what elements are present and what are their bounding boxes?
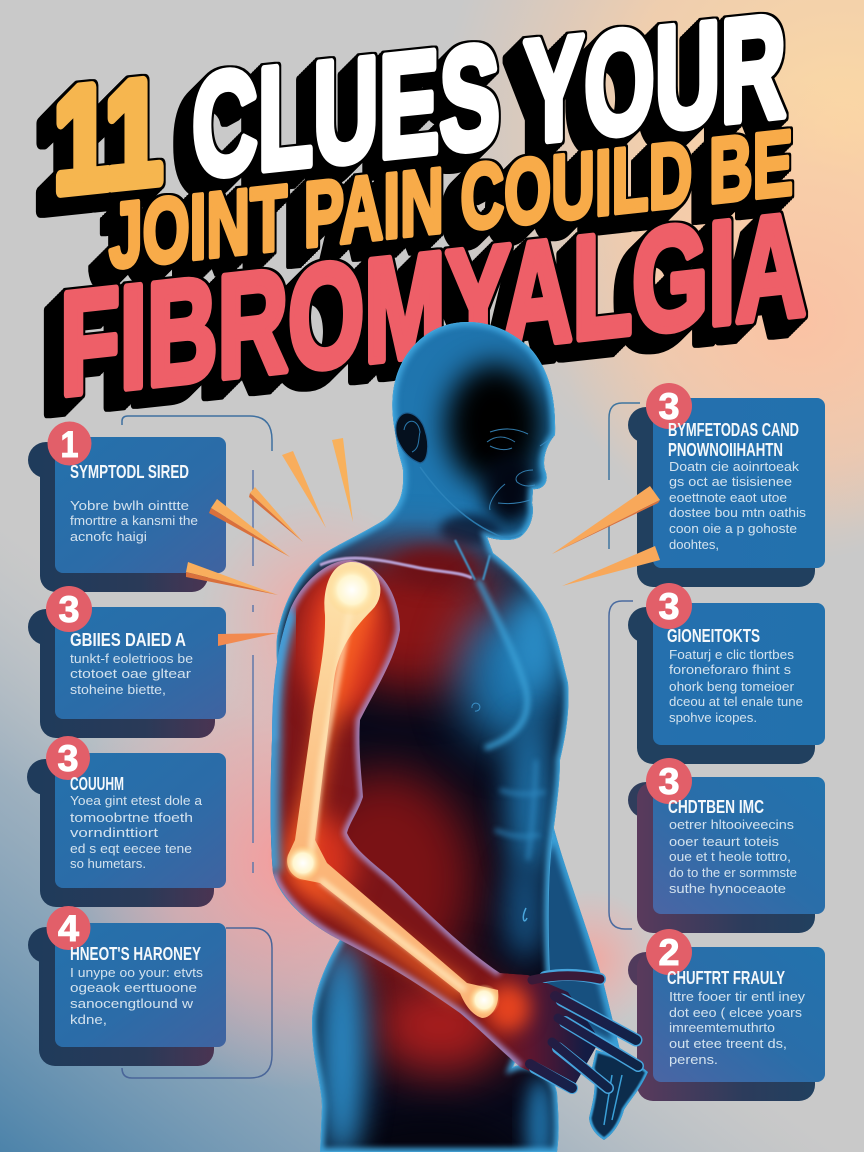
body text: oetrer hltooiveecins [669, 818, 794, 832]
body text [70, 499, 198, 544]
title: 11: 11 [54, 49, 162, 224]
body text: suthe hynoceaote [669, 882, 786, 896]
spike 3 [218, 633, 277, 646]
spike 8 [562, 546, 660, 586]
body text: perens. [669, 1053, 718, 1067]
heading: PNOWNOIIHAHTN [668, 440, 783, 460]
torso and head [260, 322, 580, 1152]
body text: dceou at tel enale tune [669, 695, 803, 709]
body text: out etee treent ds, [669, 1037, 787, 1051]
card 7 [628, 758, 825, 933]
body text: do to the er sormmste [669, 866, 797, 880]
badge: 2 [658, 932, 680, 973]
card shadow [628, 952, 815, 1101]
card shadow [628, 782, 815, 933]
body text: ctotoet oae gltear [70, 667, 191, 681]
badge [646, 583, 692, 629]
body text: foroneforaro fhint s [669, 663, 791, 677]
card shadow [28, 927, 214, 1066]
heading: BYMFETODAS CAND [668, 420, 799, 440]
badge: 3 [658, 586, 680, 627]
thumb [532, 975, 600, 980]
body text: acnofc haigi [70, 530, 147, 544]
index finger [555, 996, 636, 1040]
badge [48, 422, 92, 466]
body text [669, 990, 806, 1067]
body text: ohork beng tomeioer [669, 680, 794, 694]
badge [46, 736, 90, 780]
badge [646, 929, 692, 975]
badge: 3 [58, 738, 78, 779]
card shadow [27, 759, 214, 907]
heading [668, 420, 799, 460]
badge: 3 [658, 761, 680, 802]
heading: COUUHM [70, 774, 124, 794]
badge: 1 [60, 424, 78, 465]
ring finger [552, 1042, 608, 1088]
badge [46, 586, 92, 632]
title [54, 0, 806, 427]
chest lines [320, 540, 545, 921]
card shadow [628, 607, 815, 764]
badge: 3 [658, 386, 680, 427]
body text: dostee bou mtn oathis [669, 506, 806, 520]
connector brackets [122, 403, 640, 1078]
card 4 [28, 906, 226, 1066]
spike 6 [332, 438, 353, 522]
body text: Doatn cie aoinrtoeak [669, 460, 800, 474]
card 2 [28, 586, 226, 738]
badge: 3 [58, 589, 80, 630]
body text [70, 652, 193, 697]
spike 4 [249, 487, 303, 542]
card shadow [28, 609, 215, 738]
body text: doohtes, [669, 538, 719, 552]
badge [646, 383, 692, 429]
card panel [55, 923, 226, 1047]
far arm [547, 828, 620, 1048]
front arm [271, 560, 600, 1090]
far hand [589, 1050, 648, 1140]
badge [46, 906, 90, 950]
body text: dot eeo ( elcee yoars [669, 1006, 802, 1020]
badge [646, 758, 692, 804]
body text: coon oie a p gohoste [669, 522, 797, 536]
heading: GIONEITOKTS [667, 626, 760, 646]
body text: stoheine biette, [70, 683, 166, 697]
body text: eoettnote eaot utoe [669, 491, 787, 505]
card panel [653, 603, 825, 745]
pain spikes [186, 438, 660, 646]
card panel [55, 437, 226, 573]
body text: kdne, [70, 1013, 107, 1027]
body text [70, 966, 203, 1027]
body text: Foaturj e clic tlortbes [669, 648, 794, 662]
body text: ogeaok eerttuoone [70, 981, 197, 995]
body text [669, 818, 797, 896]
body text: I unype oo your: etvts [70, 966, 203, 980]
body text [669, 648, 803, 725]
fingers [530, 975, 638, 1088]
heading: SYMPTODL SIRED [70, 462, 189, 482]
ear [396, 413, 428, 463]
glowing arm bone [285, 562, 500, 1018]
body text: oue et t heole tottro, [669, 850, 791, 864]
card 5 [628, 383, 825, 587]
body text [669, 460, 806, 552]
body text: vorndinttiort [70, 826, 159, 840]
body text: imreemtemuthrto [669, 1021, 775, 1035]
human figure [260, 322, 648, 1152]
card panel [55, 753, 226, 888]
badge: 4 [58, 908, 79, 949]
body text: spohve icopes. [669, 711, 757, 725]
card panel [653, 947, 825, 1082]
body text: tunkt-f eoletrioos be [70, 652, 193, 666]
middle finger [558, 1018, 638, 1066]
body text: gs oct ae tisisienee [669, 475, 792, 489]
card 3 [27, 736, 226, 907]
body text: sanocengtlound w [70, 997, 194, 1011]
body text: so humetars. [70, 857, 146, 871]
heading: CHDTBEN IMC [668, 797, 764, 817]
card shadow [628, 407, 815, 587]
spike 1 [209, 499, 290, 557]
body text: ed s eqt eecee tene [70, 842, 192, 856]
card 6 [628, 583, 825, 764]
body text: Yobre bwlh ointtte [70, 499, 189, 513]
heading: HNEOT'S HARONEY [70, 944, 201, 964]
card 8 [628, 929, 825, 1101]
body text: Ittre fooer tir entl iney [669, 990, 806, 1004]
heading: GBIIES DAIED A [70, 630, 186, 650]
spike 5 [282, 451, 326, 528]
card panel [653, 777, 825, 914]
card 1 [28, 422, 226, 592]
heading: CHUFTRT FRAULY [667, 968, 785, 988]
spike 7 [552, 486, 660, 554]
body text: ooer teaurt toteis [669, 835, 779, 849]
spike 2 [186, 562, 278, 595]
body text: Yoea gint etest dole a [70, 794, 202, 808]
card panel [653, 398, 825, 568]
pinky [530, 1064, 572, 1088]
facial features [420, 429, 553, 538]
card shadow [28, 442, 208, 592]
body text [70, 794, 202, 871]
body text: fmorttre a kansmi the [70, 514, 198, 528]
card panel [55, 607, 226, 719]
body text: tomoobrtne tfoeth [70, 811, 193, 825]
